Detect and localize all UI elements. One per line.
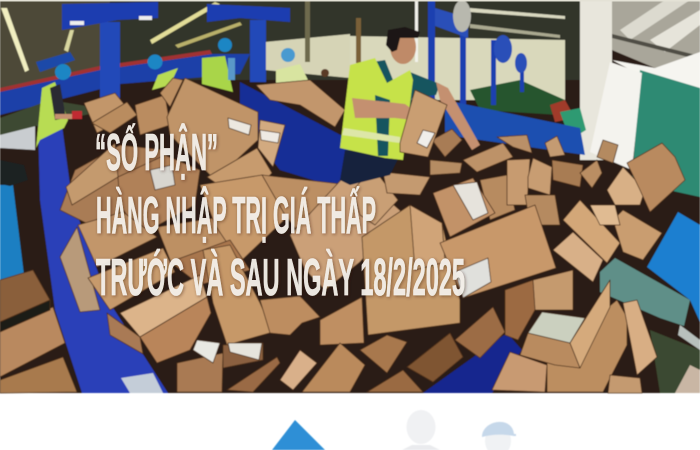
icon: blue triangle (272, 420, 325, 450)
title: “SỐ PHẬN” (95, 123, 218, 182)
blue crate and dark bag at left (0, 150, 38, 282)
blue bin at the bottom (423, 333, 522, 393)
low conveyor in the back (445, 100, 585, 155)
white label on the conveyor (121, 373, 163, 393)
boxes at far left (0, 270, 77, 393)
central worker (340, 27, 480, 185)
sloped blue belt in the centre (240, 82, 352, 192)
title (95, 123, 465, 307)
far wall (265, 0, 575, 122)
boxes far pile (60, 78, 403, 312)
icon: faded person (402, 410, 440, 450)
main blue conveyor and sorting frames (0, 2, 290, 150)
warehouse ceiling (0, 0, 612, 90)
box held by the worker (400, 90, 447, 157)
top white edge (0, 0, 700, 2)
icon: faded person with cap (482, 422, 516, 450)
boxes right middle pile (320, 200, 662, 345)
workers on the left (36, 38, 329, 148)
roof and teal wall on the right (560, 0, 700, 197)
blue left conveyor (38, 125, 168, 393)
blue machine and perforated plate at right (600, 212, 700, 393)
blue fans (415, 0, 527, 108)
boxes top right pile (353, 129, 685, 237)
boxes bottom pile (107, 245, 657, 393)
